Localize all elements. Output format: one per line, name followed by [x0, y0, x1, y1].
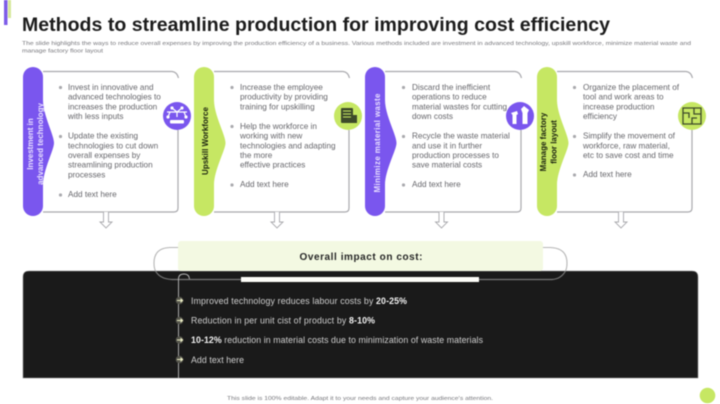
impact list: 10-12% reduction in material costs due to minimization of waste materials: [191, 335, 484, 345]
bullet text: productivity by providing: [240, 92, 328, 102]
bullet markers: [176, 297, 183, 363]
bullet text: down costs: [412, 112, 453, 121]
impact list: [176, 296, 484, 365]
panel: minimize material waste: [365, 67, 534, 216]
title: Methods to streamline production for improving cost efficiency: [22, 14, 610, 36]
bullet text: Update the existing: [68, 132, 139, 140]
bullet text: Add text here: [583, 170, 632, 179]
bullet text: Organize the placement of: [583, 83, 680, 92]
panel: manage factory floor layout: [537, 67, 706, 216]
bullet text: technologies to cut down: [68, 141, 159, 150]
bullet text: advanced technologies to: [68, 92, 161, 102]
side tab: [365, 67, 396, 216]
icon: technology network: [163, 102, 191, 130]
tab label: Manage factory: [539, 112, 548, 171]
bullet text: material wastes for cutting: [412, 102, 508, 111]
panel: upskill workforce: [194, 67, 362, 216]
bullet text: technologies and adapting: [240, 141, 336, 150]
bullet text: [59, 83, 161, 199]
bullet text: Add text here: [240, 180, 289, 189]
tab label: [539, 112, 558, 171]
subtitle: The slide highlights the ways to reduce overall expenses by improving the production efficiency of a business. Various methods included are investment in advanced technology, upskill workforce, minimize material waste and: [22, 41, 691, 47]
bullet text: efficiency: [583, 112, 618, 121]
side tab: [537, 67, 568, 216]
bullet text: etc to save cost and time: [583, 151, 674, 160]
card outline: [557, 72, 692, 212]
panel: investment in advanced technology: [23, 67, 191, 216]
footer note: This slide is 100% editable. Adapt it to your needs and capture your audience's attention.: [227, 396, 494, 402]
bullet text: Help the workforce in: [240, 122, 317, 131]
arrow: down from panel 1: [100, 212, 112, 228]
side tab: [23, 67, 54, 216]
timeline line: [178, 274, 190, 378]
bullet text: Recycle the waste material: [412, 132, 510, 140]
bullet text: tool and work areas to: [583, 92, 664, 102]
bullet text: working with new: [239, 132, 302, 140]
bullet text: save material costs: [412, 161, 482, 170]
bullet text: Discard the inefficient: [412, 83, 491, 92]
bullet text: increase production: [583, 102, 655, 111]
card outline: [43, 72, 178, 212]
bullet text: Increase the employee: [240, 83, 323, 92]
bullet text: streamlining production: [68, 161, 153, 170]
tab label: [26, 103, 45, 185]
corner dot: [700, 388, 715, 403]
bullet text: the more: [240, 151, 273, 160]
impact list: Reduction in per unit cist of product by 8-10%: [191, 316, 375, 326]
arrow: down from panel 2: [271, 212, 283, 228]
bullet text: effective practices: [240, 161, 305, 170]
impact header: Overall impact on cost:: [300, 252, 422, 263]
panel: overall impact dark box: [23, 241, 698, 378]
icon: floor plan: [678, 102, 706, 130]
side tab: [194, 67, 226, 216]
tab label: Upskill Workforce: [201, 107, 210, 175]
tab label: advanced technology: [36, 103, 45, 185]
bullet text: Add text here: [412, 180, 461, 189]
bullet text: with less inputs: [67, 112, 124, 121]
bullet text: overall expenses by: [68, 151, 141, 160]
bullet text: processes: [68, 170, 105, 180]
top accent bars: [4, 0, 11, 25]
bullet text: training for upskilling: [240, 102, 315, 111]
arrow: down from panel 3: [436, 212, 448, 228]
tab label: floor layout: [550, 120, 558, 164]
impact header: [154, 241, 567, 282]
arrow: down from panel 4: [615, 212, 627, 228]
bullet text: production processes to: [412, 151, 499, 160]
bullet text: Add text here: [68, 190, 117, 199]
bullet text: operations to reduce: [412, 92, 487, 102]
bullet text: and use it in further: [412, 141, 482, 150]
icon: recycling bins: [506, 102, 534, 130]
tab label: Minimize material waste: [373, 93, 382, 192]
impact list: Improved technology reduces labour costs by 20-25%: [191, 296, 407, 306]
bullet text: increases the production: [68, 102, 158, 111]
impact list: Add text here: [191, 355, 244, 365]
subtitle: manage factory floor layout: [22, 48, 104, 54]
bullet text: [230, 83, 336, 189]
icon: training document: [334, 102, 362, 130]
card outline: [385, 72, 522, 212]
card outline: [214, 72, 350, 212]
bullet text: Simplify the movement of: [583, 132, 676, 140]
bullet text: workforce, raw material,: [582, 141, 670, 150]
bullet text: [573, 83, 680, 179]
bullet text: Invest in innovative and: [68, 83, 154, 92]
tab label: Investment in: [26, 118, 35, 170]
subtitle: [22, 41, 691, 54]
bullet text: [402, 83, 510, 189]
